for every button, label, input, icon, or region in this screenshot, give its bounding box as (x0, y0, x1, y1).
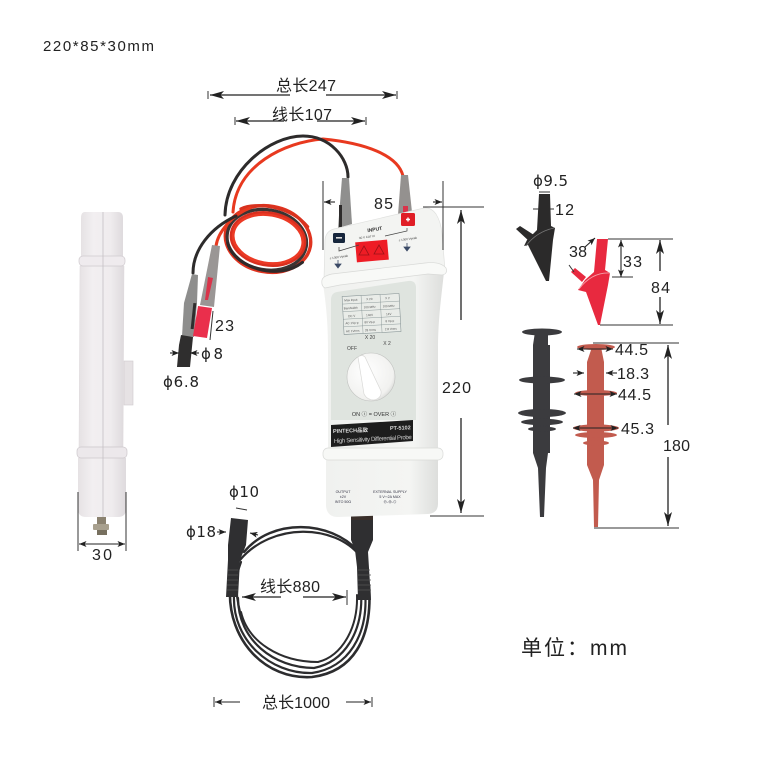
bottom connector stub (351, 515, 373, 521)
specification table: 8 Vp-p (385, 319, 395, 323)
cable connector: right (351, 520, 373, 600)
input heading: INPUT (367, 226, 383, 234)
black label strip: PT-5102 (390, 425, 411, 432)
range labels: X 20 (365, 335, 375, 341)
label phi 8: ϕ8 (201, 345, 223, 363)
lower band (323, 448, 443, 460)
dimensions: red hook probe: 45.3 (621, 421, 654, 438)
dimensions: red hook probe: 44.5 (615, 342, 648, 359)
hook probe: red (573, 344, 619, 527)
negative button (333, 233, 345, 243)
dimensions: red clip: 33 (623, 254, 642, 271)
dimension: cable length 880: 线长880 (260, 578, 320, 596)
range labels (347, 335, 391, 352)
label phi 6.8: ϕ6.8 (163, 373, 199, 391)
dimension: lead length 107: 线长107 (272, 106, 332, 124)
red wire (233, 139, 403, 212)
over indicator: ON ⓘ = OVER ⓘ (352, 410, 397, 418)
dimension: total cable length 1000: 总长1000 (262, 694, 330, 712)
dimensions: red hook probe: 180 (663, 438, 690, 455)
range labels: OFF (347, 346, 357, 352)
specification table (342, 294, 401, 334)
external supply text: ⊖-⊕-⊙ (383, 500, 397, 504)
dimensions: red clip: 84 (651, 280, 670, 297)
specification table: Bandwidth (344, 306, 358, 310)
side connector (93, 517, 109, 535)
dimensions: red clip: 38 (569, 244, 587, 261)
specification table: 28 Vrms (365, 328, 377, 332)
main section (323, 272, 444, 452)
red plug (200, 245, 220, 307)
range knob (347, 353, 395, 401)
external supply text (373, 490, 407, 504)
specification table: AC 1Vrms (346, 329, 360, 333)
input lines and symbols: ± 1300 Vpeak (329, 254, 349, 260)
input lines and symbols (329, 228, 418, 268)
black label strip: High Sensitivity Differential Probe (334, 435, 413, 445)
external supply text: 5 V⎓2A MAX (379, 495, 401, 499)
unit note: 单位：mm (521, 637, 627, 660)
specification table: 100 MHz (364, 305, 376, 309)
output text: ±2V (340, 495, 347, 499)
external supply text: EXTERNAL SUPPLY (373, 490, 407, 494)
specification table: X 2 (385, 296, 390, 300)
cable connector dimensions (186, 483, 259, 541)
input lines and symbols: ± 1300 Vpeak (398, 236, 418, 242)
dimensions: red clip (569, 238, 673, 325)
labels: black clip: ϕ9.5 (533, 172, 568, 190)
black plug (182, 274, 198, 337)
dimension: width 30 (78, 492, 126, 564)
hook probe: black (518, 328, 566, 517)
dimension: width 85: 85 (374, 196, 393, 213)
specification table: 80 Vp-p (364, 320, 375, 324)
dimension: total length 247: 总长247 (276, 77, 336, 95)
specification table: 2.8 Vrms (385, 327, 397, 331)
specification table: DC V (348, 314, 355, 318)
top section (324, 208, 445, 280)
output text: INTO 50Ω (335, 500, 351, 504)
specification table: 100 MHz (383, 304, 395, 308)
cable connector dimensions: ϕ18 (186, 523, 216, 541)
lower section (326, 458, 438, 517)
lead plugs (177, 245, 220, 367)
grey panel (331, 281, 416, 420)
warning box (355, 240, 389, 262)
specification table: 140V (366, 313, 373, 317)
side tab (124, 361, 133, 405)
output text (335, 490, 351, 504)
upper band (322, 263, 446, 288)
dimension: height 220: 220 (442, 380, 471, 397)
side view of probe (77, 212, 133, 535)
specification table: X 20 (366, 297, 373, 301)
specification table: AC 1Vp-p (345, 321, 359, 325)
input lines and symbols: 30 V CAT III (359, 234, 375, 240)
dimensions: red hook probe: 44.5 (618, 387, 651, 404)
cable connector dimensions: ϕ10 (229, 483, 259, 501)
black label strip (331, 420, 413, 447)
positive button (401, 213, 415, 226)
dimensions: red hook probe: 18.3 (617, 366, 649, 383)
output cable (230, 527, 369, 677)
dimension: lead length 107 (235, 106, 366, 125)
alligator clip: black (516, 194, 555, 281)
coil (220, 199, 316, 279)
specification table: Max Input (344, 298, 358, 302)
test leads (193, 136, 403, 279)
dimension: width 85 (323, 181, 443, 250)
main probe body (322, 175, 446, 521)
alligator clip: red (571, 239, 610, 325)
plug dimensions (163, 311, 234, 391)
cable connector: left (226, 518, 248, 597)
dimension: cable length 880 (242, 578, 347, 605)
black label strip: PINTECH品致 (333, 426, 369, 435)
specification table: 14V (386, 312, 392, 316)
output text: OUTPUT (336, 490, 351, 494)
heading: overall size: 220*85*30mm (43, 38, 154, 55)
label 23: 23 (215, 318, 234, 335)
range labels: X 2 (383, 341, 391, 347)
labels: black clip (533, 172, 574, 219)
dimension: width 30: 30 (92, 547, 112, 564)
dimensions: red hook probe (573, 342, 690, 528)
probe input sockets (338, 175, 412, 228)
black wire (225, 136, 348, 215)
labels: black clip: 12 (555, 202, 574, 219)
